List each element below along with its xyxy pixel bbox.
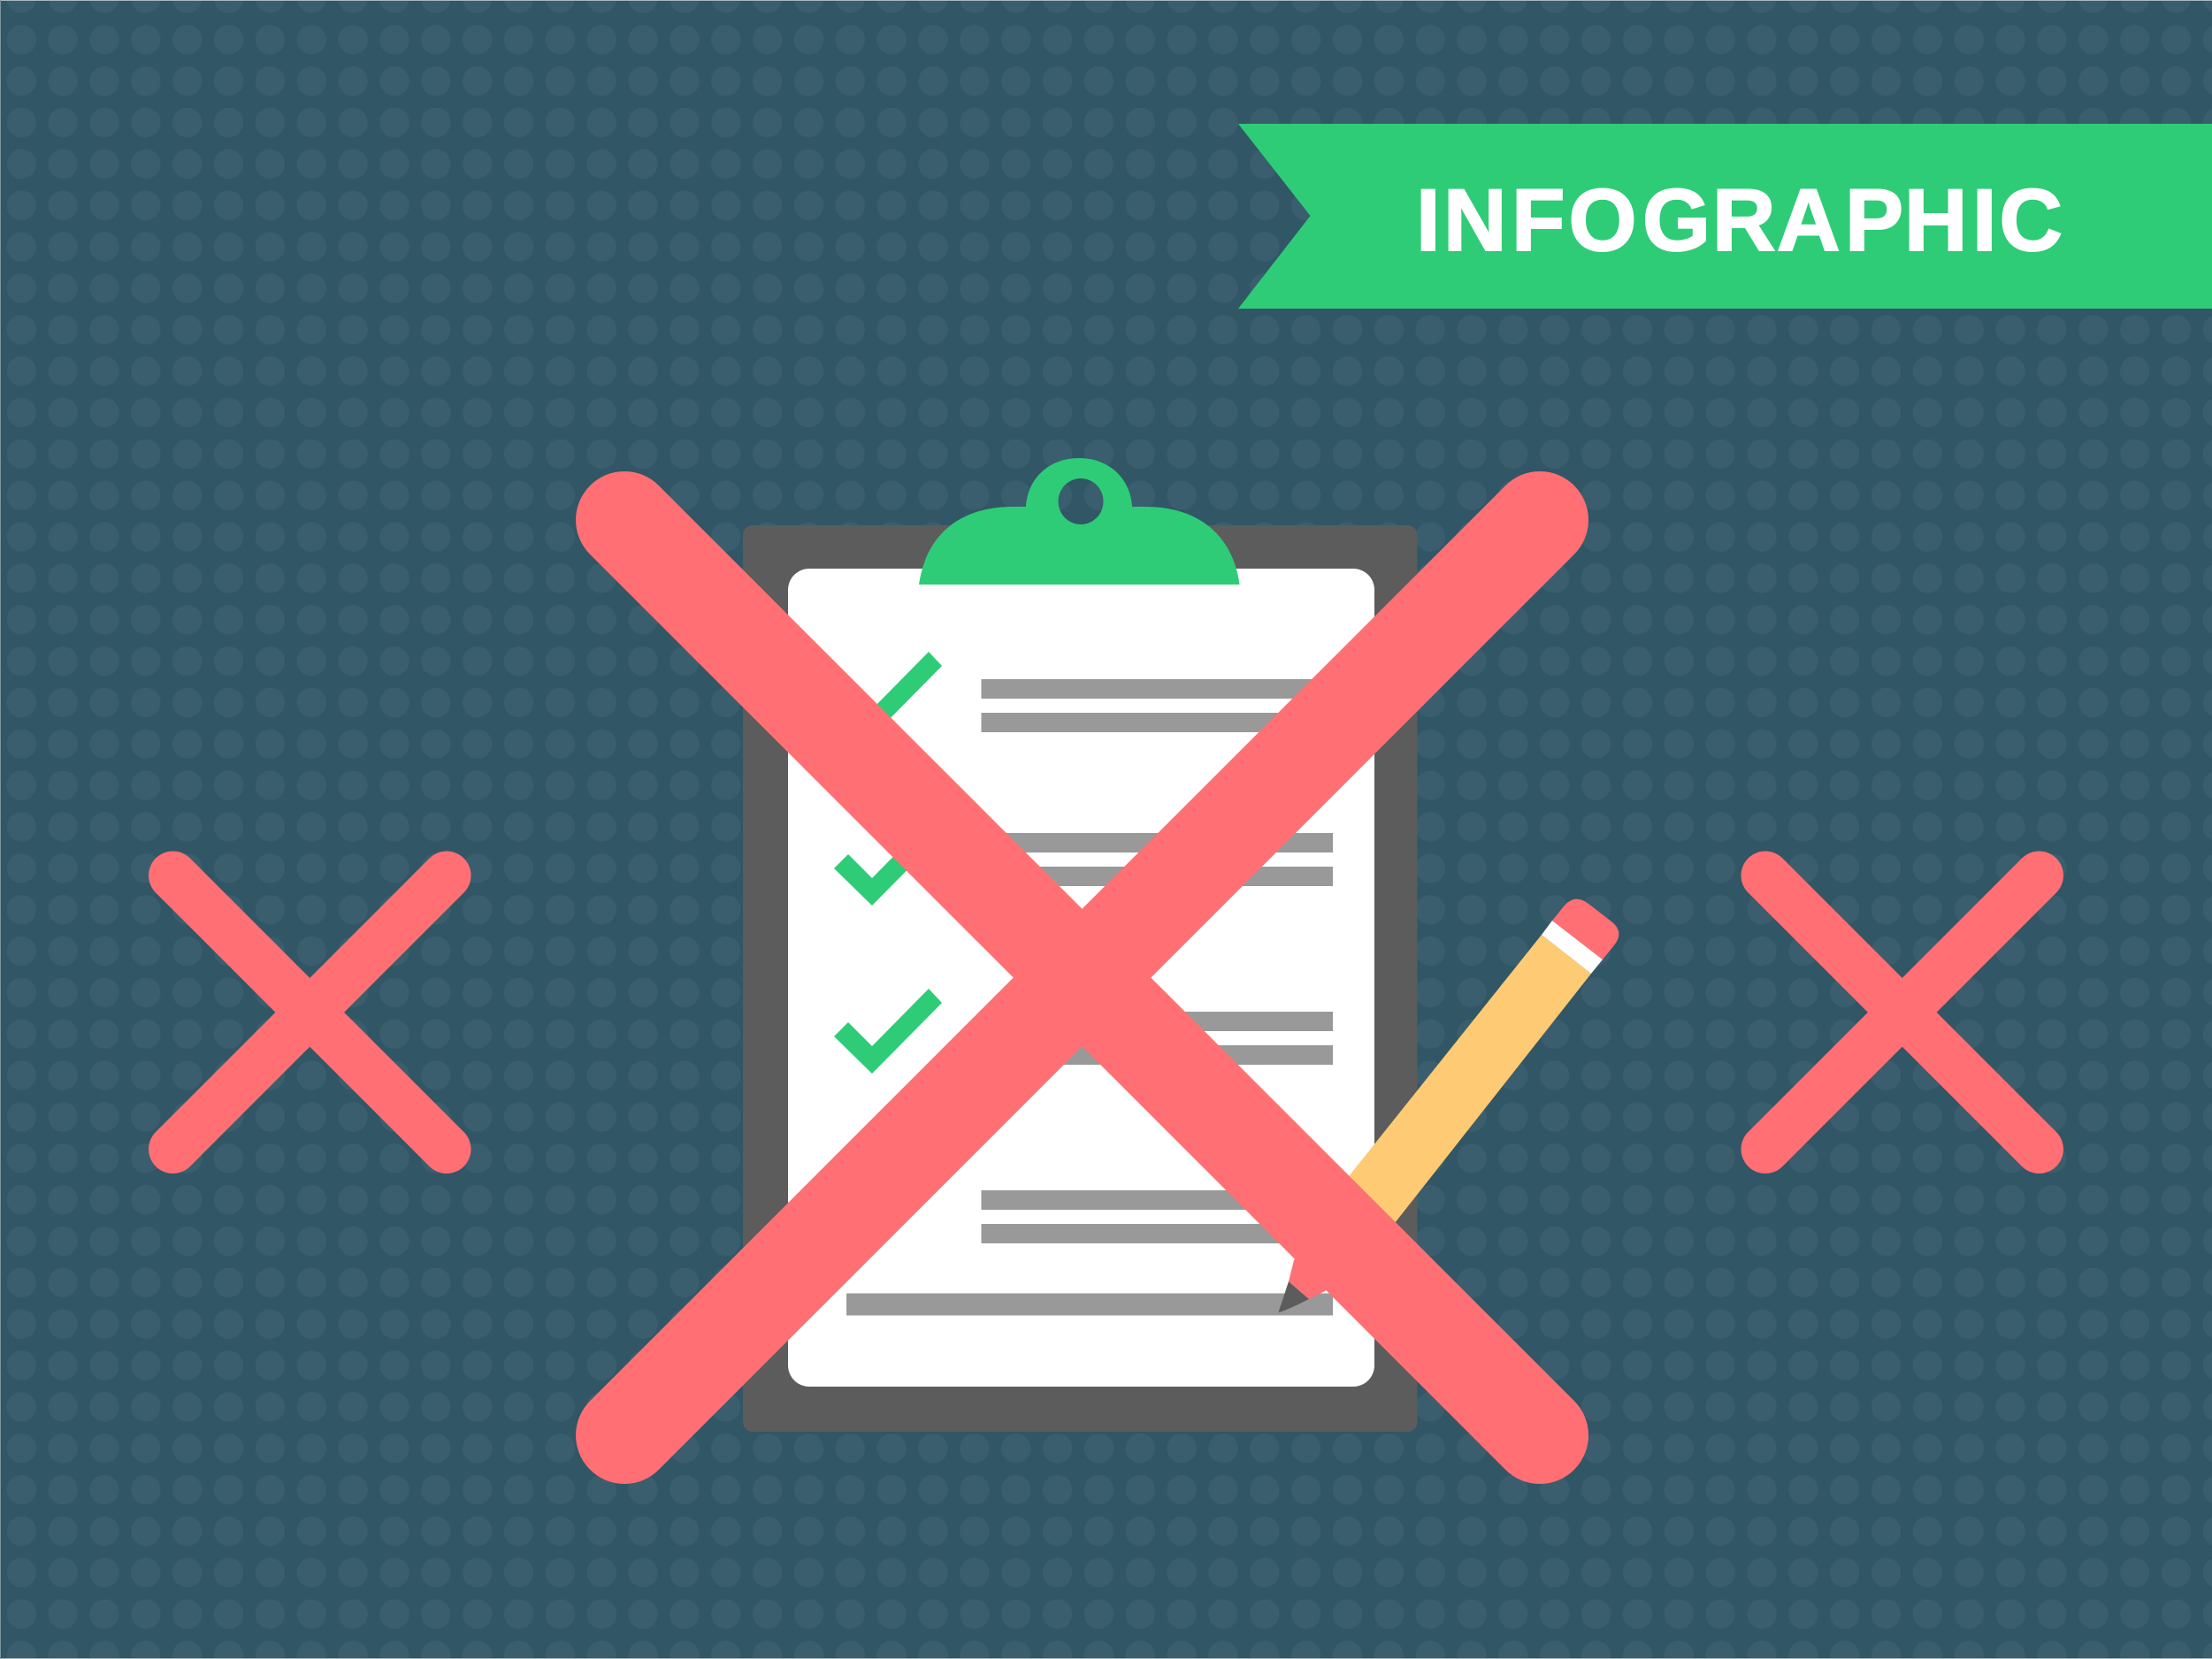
pencil ferrule <box>1542 921 1603 974</box>
text lines: group 2 <box>982 833 1333 886</box>
icon: large red X <box>624 520 1540 1435</box>
text lines: group 3 <box>982 1012 1333 1065</box>
pencil point section <box>1289 1229 1362 1299</box>
pencil eraser <box>1552 899 1619 959</box>
text lines: group 4 <box>982 1190 1333 1243</box>
clipboard backing board <box>743 525 1417 1432</box>
clip <box>919 458 1240 585</box>
pencil <box>1279 899 1619 1312</box>
pencil body <box>1318 935 1591 1265</box>
bottom line <box>846 1293 1333 1316</box>
pencil tip <box>1279 1281 1309 1312</box>
check mark 2 <box>834 821 942 906</box>
text lines: group 1 <box>982 679 1333 732</box>
check mark 3 <box>834 989 942 1074</box>
banner: green ribbon with title <box>1238 124 2212 309</box>
check mark 1 <box>834 652 942 737</box>
title: INFOGRAPHIC <box>1416 171 2063 269</box>
icon: small red X right <box>1765 875 2040 1150</box>
icon: small red X left <box>173 875 447 1150</box>
clipboard <box>743 458 1417 1432</box>
paper sheet <box>788 569 1374 1387</box>
